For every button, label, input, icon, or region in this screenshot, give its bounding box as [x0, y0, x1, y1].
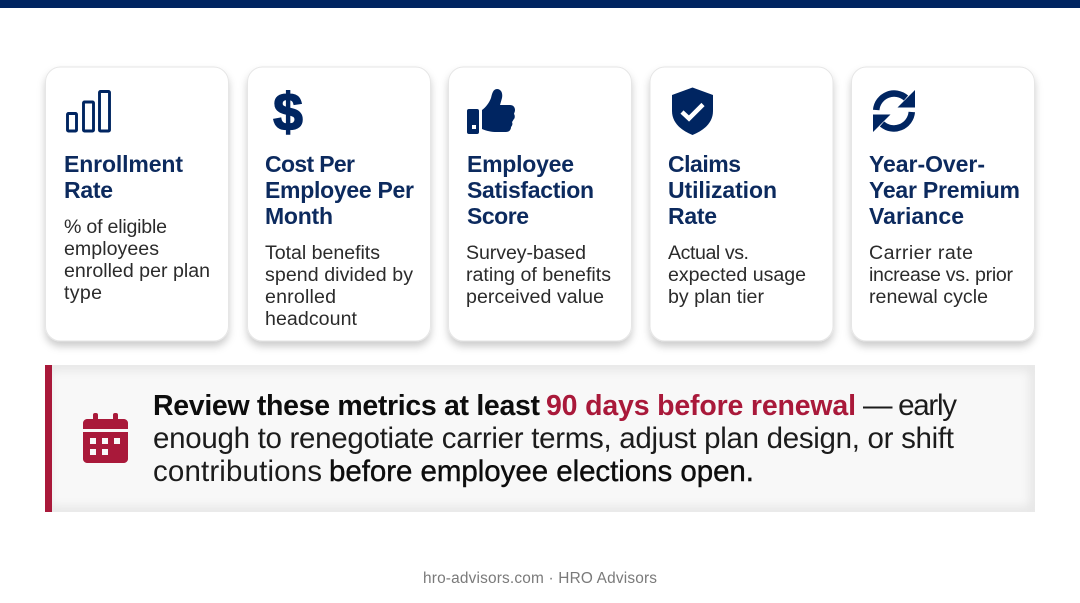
icon: refresh arrows [873, 90, 915, 132]
description: cost per employee: Total benefits [265, 242, 380, 264]
callout text: contributions [153, 455, 322, 488]
heading: year-over-year premium variance: Year Premium [869, 177, 1020, 203]
description: cost per employee: enrolled [265, 286, 336, 308]
icon: shield check [672, 88, 713, 135]
panel: enrollment rate [46, 67, 228, 341]
description: employee satisfaction: perceived value [466, 286, 604, 308]
top bar [0, 0, 1080, 8]
icon: bar chart [68, 92, 110, 131]
description: enrollment rate: employees [64, 238, 159, 260]
description: claims utilization: Actual vs. [668, 242, 749, 264]
heading: employee satisfaction: Score [467, 203, 529, 229]
heading: claims utilization: Claims [668, 151, 741, 177]
description: year-over-year premium variance: increase vs. prior [869, 264, 1013, 286]
heading: cost per employee: Employee Per [265, 177, 414, 203]
heading: year-over-year premium variance: Year-Over- [869, 151, 985, 177]
description: employee satisfaction: Survey-based [466, 242, 586, 264]
heading: cost per employee: Cost Per [265, 151, 355, 177]
description: employee satisfaction: rating of benefits [466, 264, 611, 286]
callout text: enough to renegotiate carrier terms, adjust plan design, or shift [153, 422, 954, 455]
icon: calendar [83, 413, 128, 463]
description: year-over-year premium variance: renewal cycle [869, 286, 988, 308]
footer: hro-advisors.com · HRO Advisors [423, 570, 657, 587]
icon: dollar sign: $ [273, 83, 303, 142]
heading: claims utilization: Rate [668, 203, 717, 229]
panel: claims utilization [650, 67, 833, 341]
heading: cost per employee: Month [265, 203, 333, 229]
description: claims utilization: expected usage [668, 264, 806, 286]
description: cost per employee: spend divided by [265, 264, 413, 286]
callout text: Review these metrics at least [153, 390, 540, 422]
panel: year-over-year premium variance [852, 67, 1034, 341]
heading: employee satisfaction: Satisfaction [467, 177, 594, 203]
heading: employee satisfaction: Employee [467, 151, 574, 177]
description: claims utilization: by plan tier [668, 286, 764, 308]
callout: review timing [45, 365, 1035, 512]
callout text: 90 days before renewal [546, 390, 856, 422]
panel: employee satisfaction [448, 67, 632, 341]
description: enrollment rate: enrolled per plan [64, 260, 210, 282]
icon: thumbs up [467, 89, 515, 134]
heading: year-over-year premium variance: Variance [869, 203, 964, 229]
callout text: before employee elections open. [329, 455, 754, 488]
callout text: — early [863, 389, 957, 422]
panel: cost per employee [248, 67, 430, 341]
description: enrollment rate: % of eligible [64, 216, 167, 238]
heading: claims utilization: Utilization [668, 177, 777, 203]
description: year-over-year premium variance: Carrier rate [869, 242, 973, 264]
heading: enrollment rate: Rate [64, 177, 113, 203]
heading: enrollment rate: Enrollment [64, 151, 183, 177]
description: enrollment rate: type [64, 282, 102, 304]
description: cost per employee: headcount [265, 308, 358, 330]
